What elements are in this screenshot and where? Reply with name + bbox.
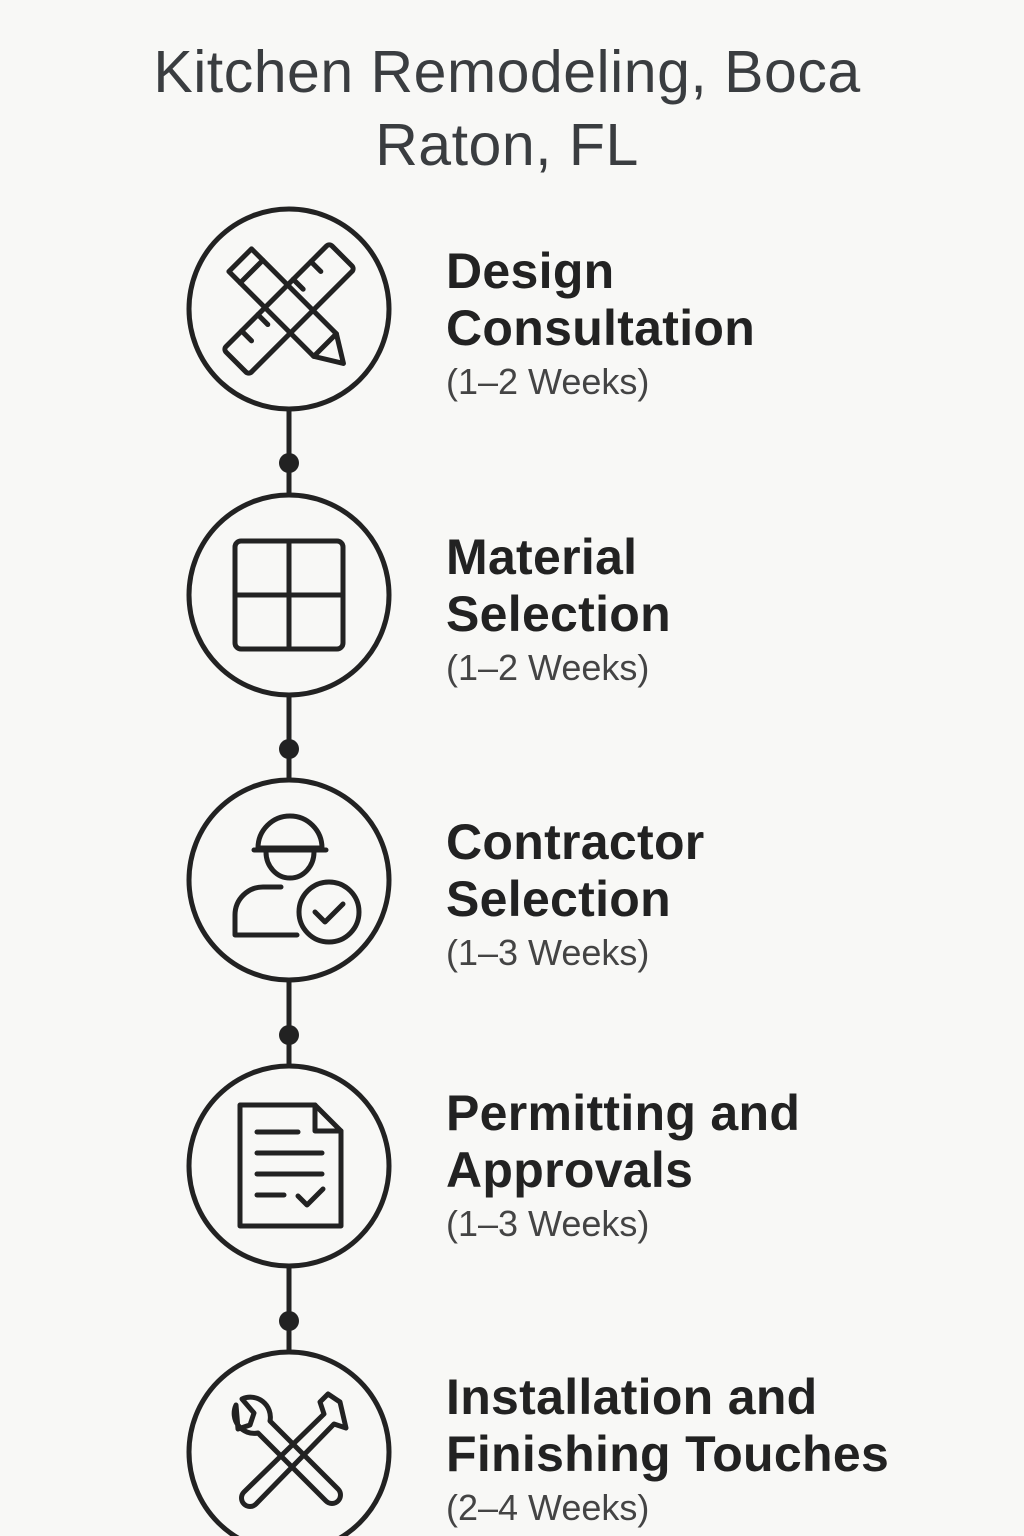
step 5 text bbox=[446, 1369, 889, 1528]
step 1 text: (1–2 Weeks) bbox=[446, 361, 649, 402]
step 1 text: Consultation bbox=[446, 300, 755, 356]
step 5 text: Finishing Touches bbox=[446, 1426, 889, 1482]
title bbox=[153, 39, 861, 178]
title: Kitchen Remodeling, Boca bbox=[153, 39, 861, 105]
step 3 text bbox=[446, 814, 705, 973]
icon: contractor bbox=[189, 780, 389, 980]
step 3 text: Selection bbox=[446, 871, 671, 927]
step 1 text: Design bbox=[446, 243, 614, 299]
step 2 text: Selection bbox=[446, 586, 671, 642]
icon: material tiles bbox=[189, 495, 389, 695]
step 5 text: Installation and bbox=[446, 1369, 818, 1425]
step 5 text: (2–4 Weeks) bbox=[446, 1487, 649, 1528]
title: Raton, FL bbox=[375, 112, 639, 178]
icon: tools bbox=[189, 1352, 389, 1536]
step 4 text: (1–3 Weeks) bbox=[446, 1203, 649, 1244]
step 4 text: Approvals bbox=[446, 1142, 693, 1198]
step 4 text: Permitting and bbox=[446, 1085, 800, 1141]
step 1 text bbox=[446, 243, 755, 402]
icon: permit document bbox=[189, 1066, 389, 1266]
icon: design ruler and pencil bbox=[189, 209, 389, 409]
step 3 text: Contractor bbox=[446, 814, 705, 870]
step 2 text: (1–2 Weeks) bbox=[446, 647, 649, 688]
step 2 text: Material bbox=[446, 529, 637, 585]
step 4 text bbox=[446, 1085, 800, 1244]
step 2 text bbox=[446, 529, 671, 688]
step 3 text: (1–3 Weeks) bbox=[446, 932, 649, 973]
